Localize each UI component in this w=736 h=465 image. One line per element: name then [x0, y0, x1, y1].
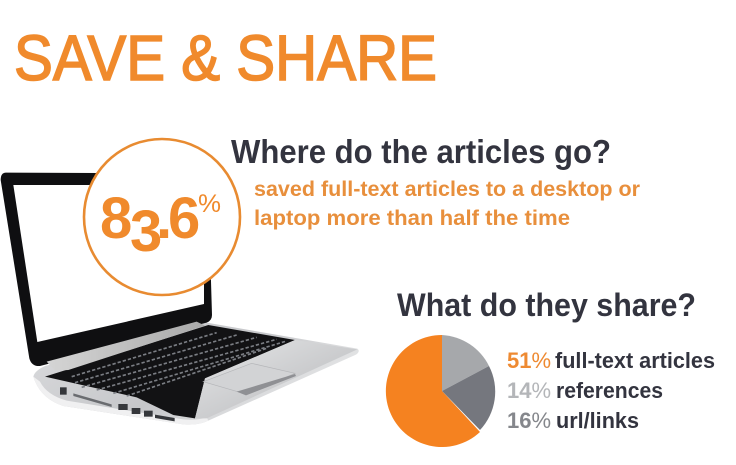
stat circle: [84, 139, 240, 295]
slice: url/links: [442, 366, 495, 430]
hinge: [47, 322, 205, 371]
stat value: 8: [100, 186, 132, 251]
legend: references: references: [556, 378, 663, 403]
ports: [60, 387, 175, 421]
legend: references: 14%: [507, 378, 551, 403]
stat value: 6: [168, 186, 200, 251]
description: saved full-text articles to a desktop or: [254, 178, 640, 201]
legend: full-text articles: 51%: [507, 348, 551, 373]
stat value: 3: [130, 199, 162, 264]
legend: url/links: url/links: [556, 408, 639, 433]
pie chart: [386, 335, 495, 447]
slice: full-text articles: [386, 335, 480, 447]
legend: full-text articles: full-text articles: [555, 348, 715, 373]
palm rest reflection: [195, 340, 357, 418]
title: SAVE & SHARE: [14, 22, 437, 94]
keyboard keys: [72, 333, 287, 396]
heading: where do the articles go: Where do the articles go?: [231, 133, 611, 170]
percent sign: %: [198, 190, 221, 218]
slice: references: [442, 335, 489, 391]
screen display: [13, 185, 204, 342]
front edge ports strip: [33, 377, 208, 425]
touchpad buttons: [237, 374, 296, 395]
touchpad: [203, 363, 295, 394]
laptop base: [33, 323, 359, 425]
keyboard well: [45, 325, 295, 418]
laptop screen: [1, 173, 212, 366]
legend: [507, 348, 715, 433]
description: laptop more than half the time: [254, 207, 570, 230]
legend: url/links: 16%: [507, 408, 551, 433]
laptop illustration: [1, 173, 359, 425]
stat value: .: [156, 186, 172, 251]
description: [254, 178, 640, 230]
heading: what do they share: What do they share?: [397, 287, 696, 323]
